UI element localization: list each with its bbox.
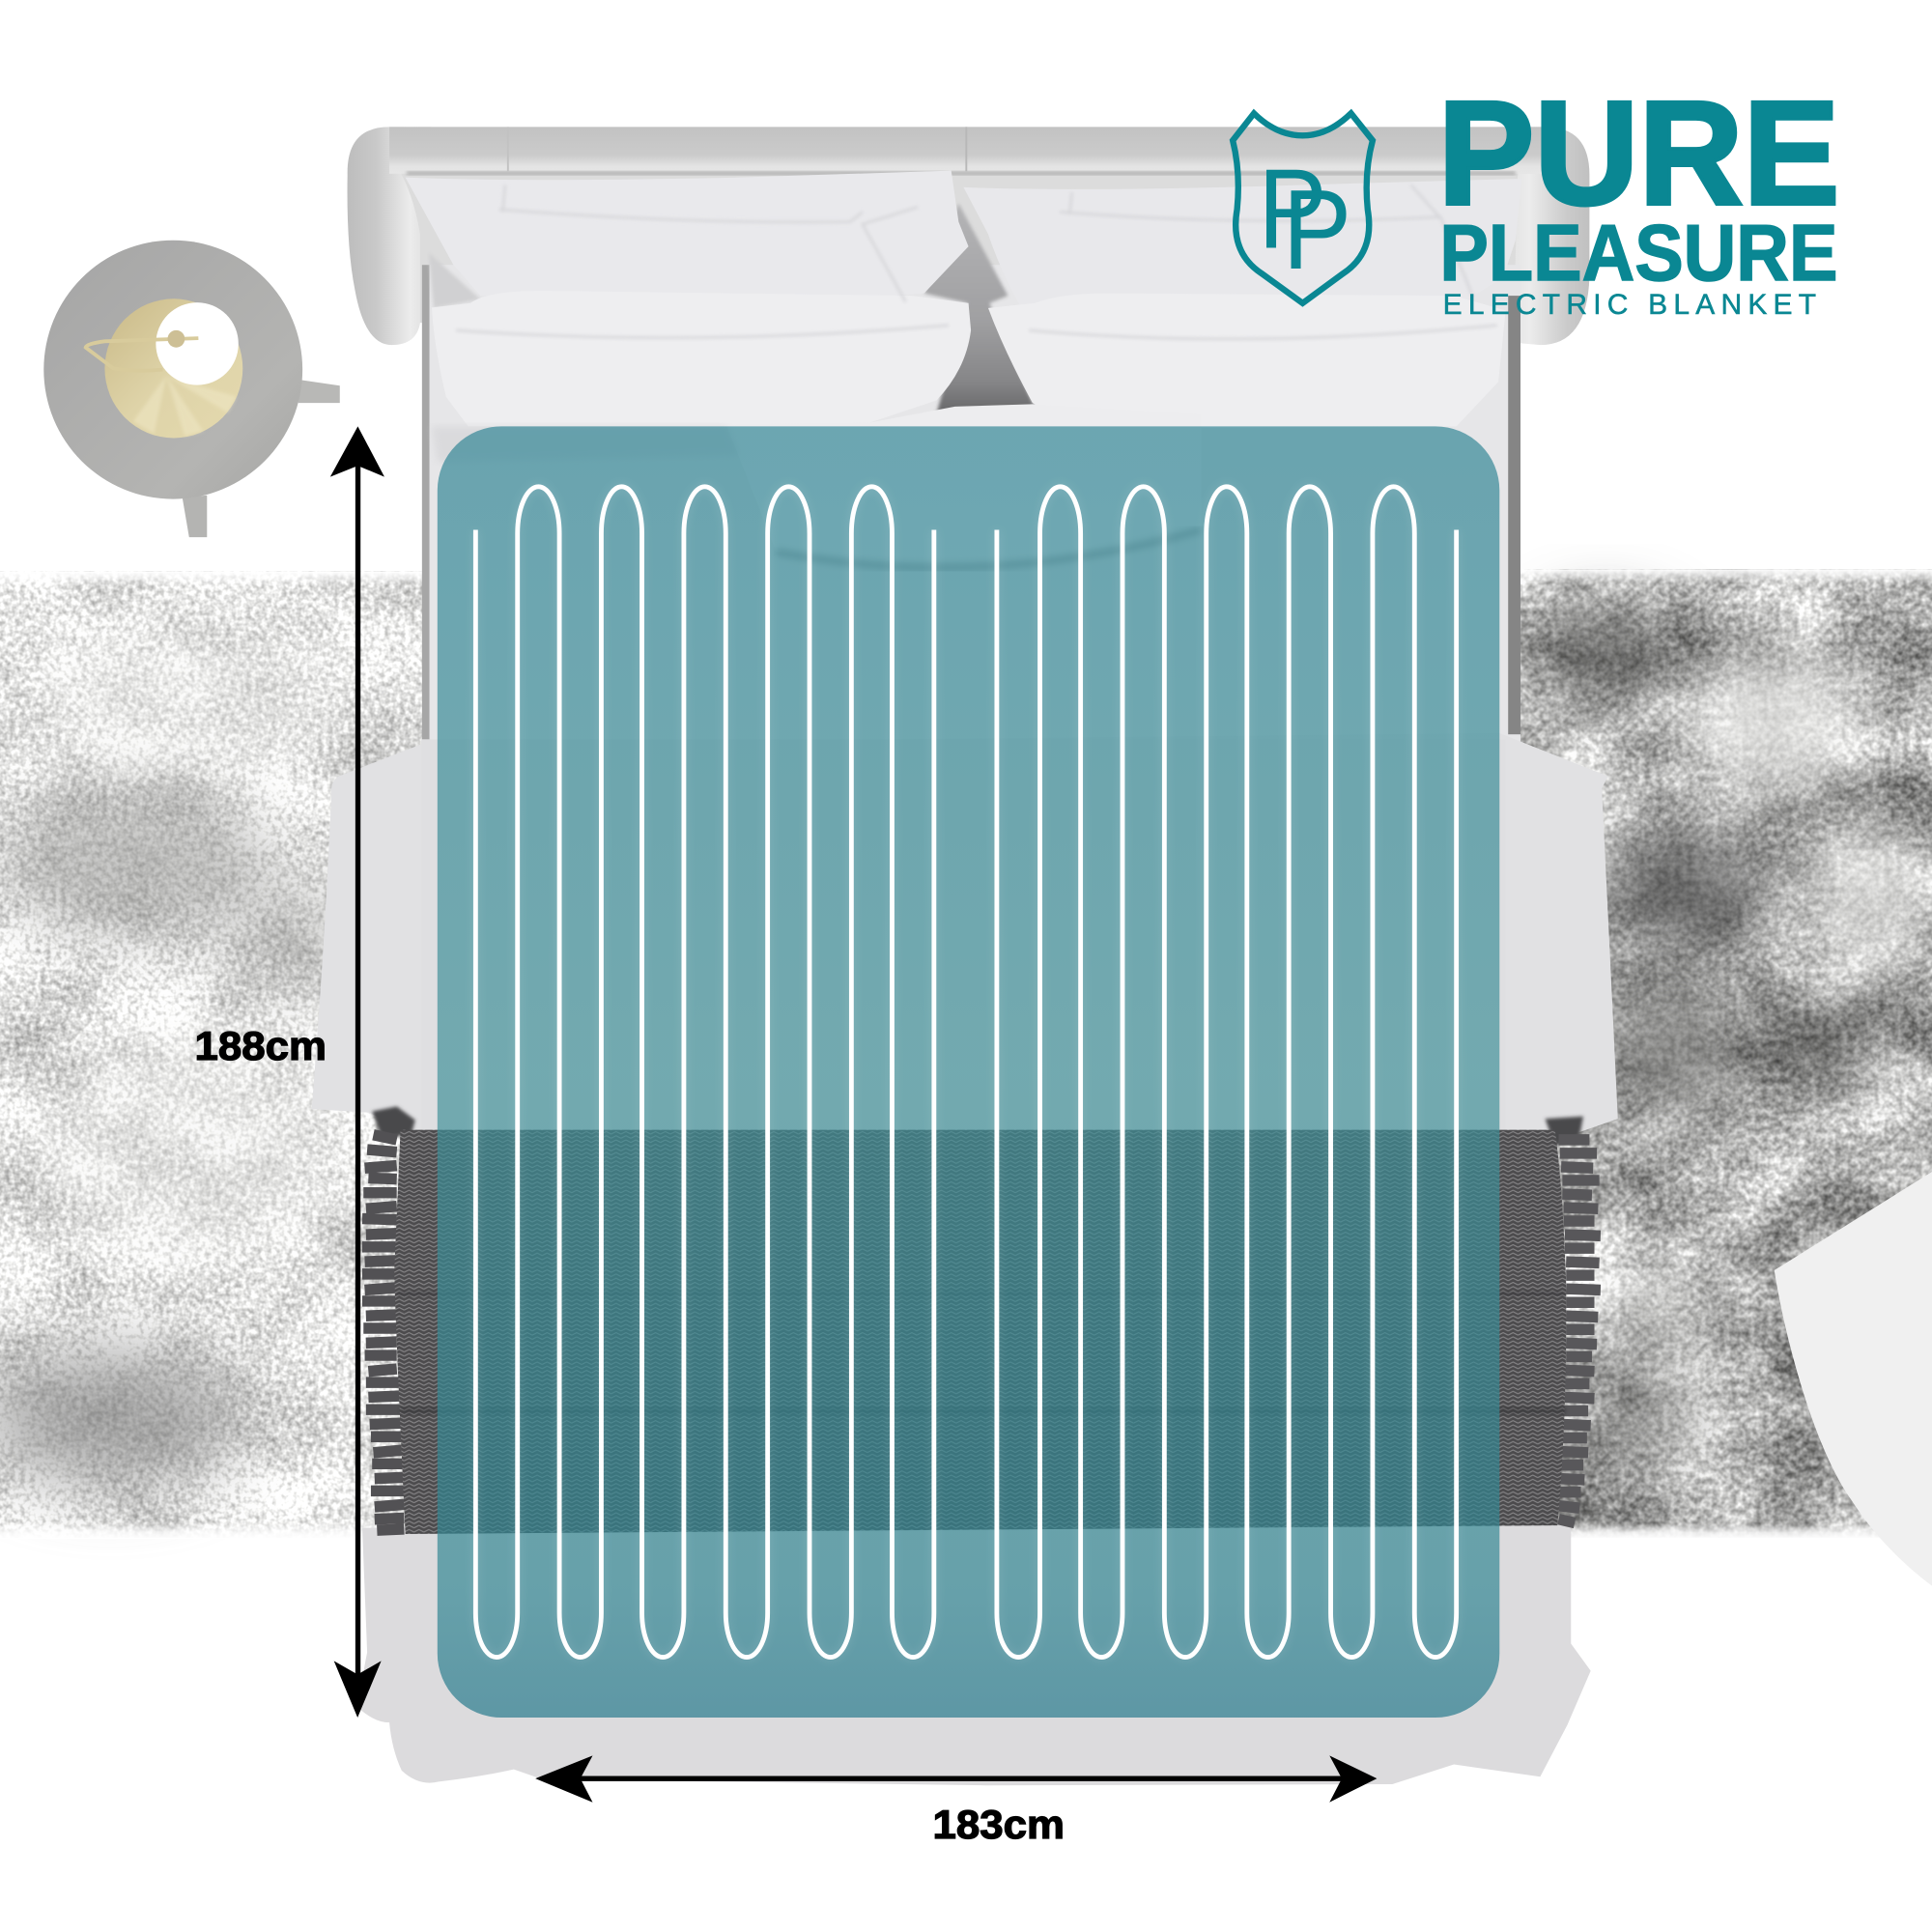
rug: right side <box>1520 569 1932 1539</box>
headboard <box>348 127 1589 345</box>
logo: shield with PP monogram <box>1233 113 1373 303</box>
fringe: right <box>1559 1140 1601 1523</box>
heating wires: soft glow <box>475 487 1457 1658</box>
arrow: width dimension <box>535 1755 1377 1803</box>
turned-down sheet <box>431 404 1202 567</box>
label: height 188cm: 188cm <box>195 1023 327 1068</box>
throw blanket <box>362 1106 1601 1534</box>
rug: left side <box>0 572 425 1539</box>
logo: shield with PP monogram: P <box>1258 145 1327 271</box>
pillow: back left <box>406 171 969 301</box>
bed <box>312 127 1618 1785</box>
pillow: front left <box>432 291 971 426</box>
heating wires: left zone <box>475 487 934 1658</box>
fringe knots <box>372 1106 1583 1146</box>
heating wires: right zone <box>997 487 1457 1658</box>
pillow gaps: shadow <box>429 203 1045 414</box>
pillows <box>406 171 1521 429</box>
arrow: height dimension <box>330 426 384 1718</box>
pillow: back right <box>963 179 1521 310</box>
mattress <box>422 265 1520 764</box>
pouf: bottom right <box>1775 1172 1932 1586</box>
label: width 183cm: 183cm <box>933 1802 1065 1847</box>
logo: wordmark: ELECTRIC BLANKET <box>1443 289 1816 321</box>
icon: bedside table with lamp <box>43 241 340 537</box>
blanket panel: translucent teal <box>438 426 1499 1718</box>
duvet <box>312 733 1618 1785</box>
fringe: left <box>362 1135 404 1530</box>
pillow creases <box>456 185 1497 339</box>
logo: wordmark: PLEASURE <box>1439 210 1837 298</box>
pillow: front right <box>988 294 1506 429</box>
logo: shield with PP monogram: P <box>1283 166 1351 293</box>
logo: wordmark: PURE <box>1438 71 1839 236</box>
logo: wordmark <box>1438 71 1839 321</box>
